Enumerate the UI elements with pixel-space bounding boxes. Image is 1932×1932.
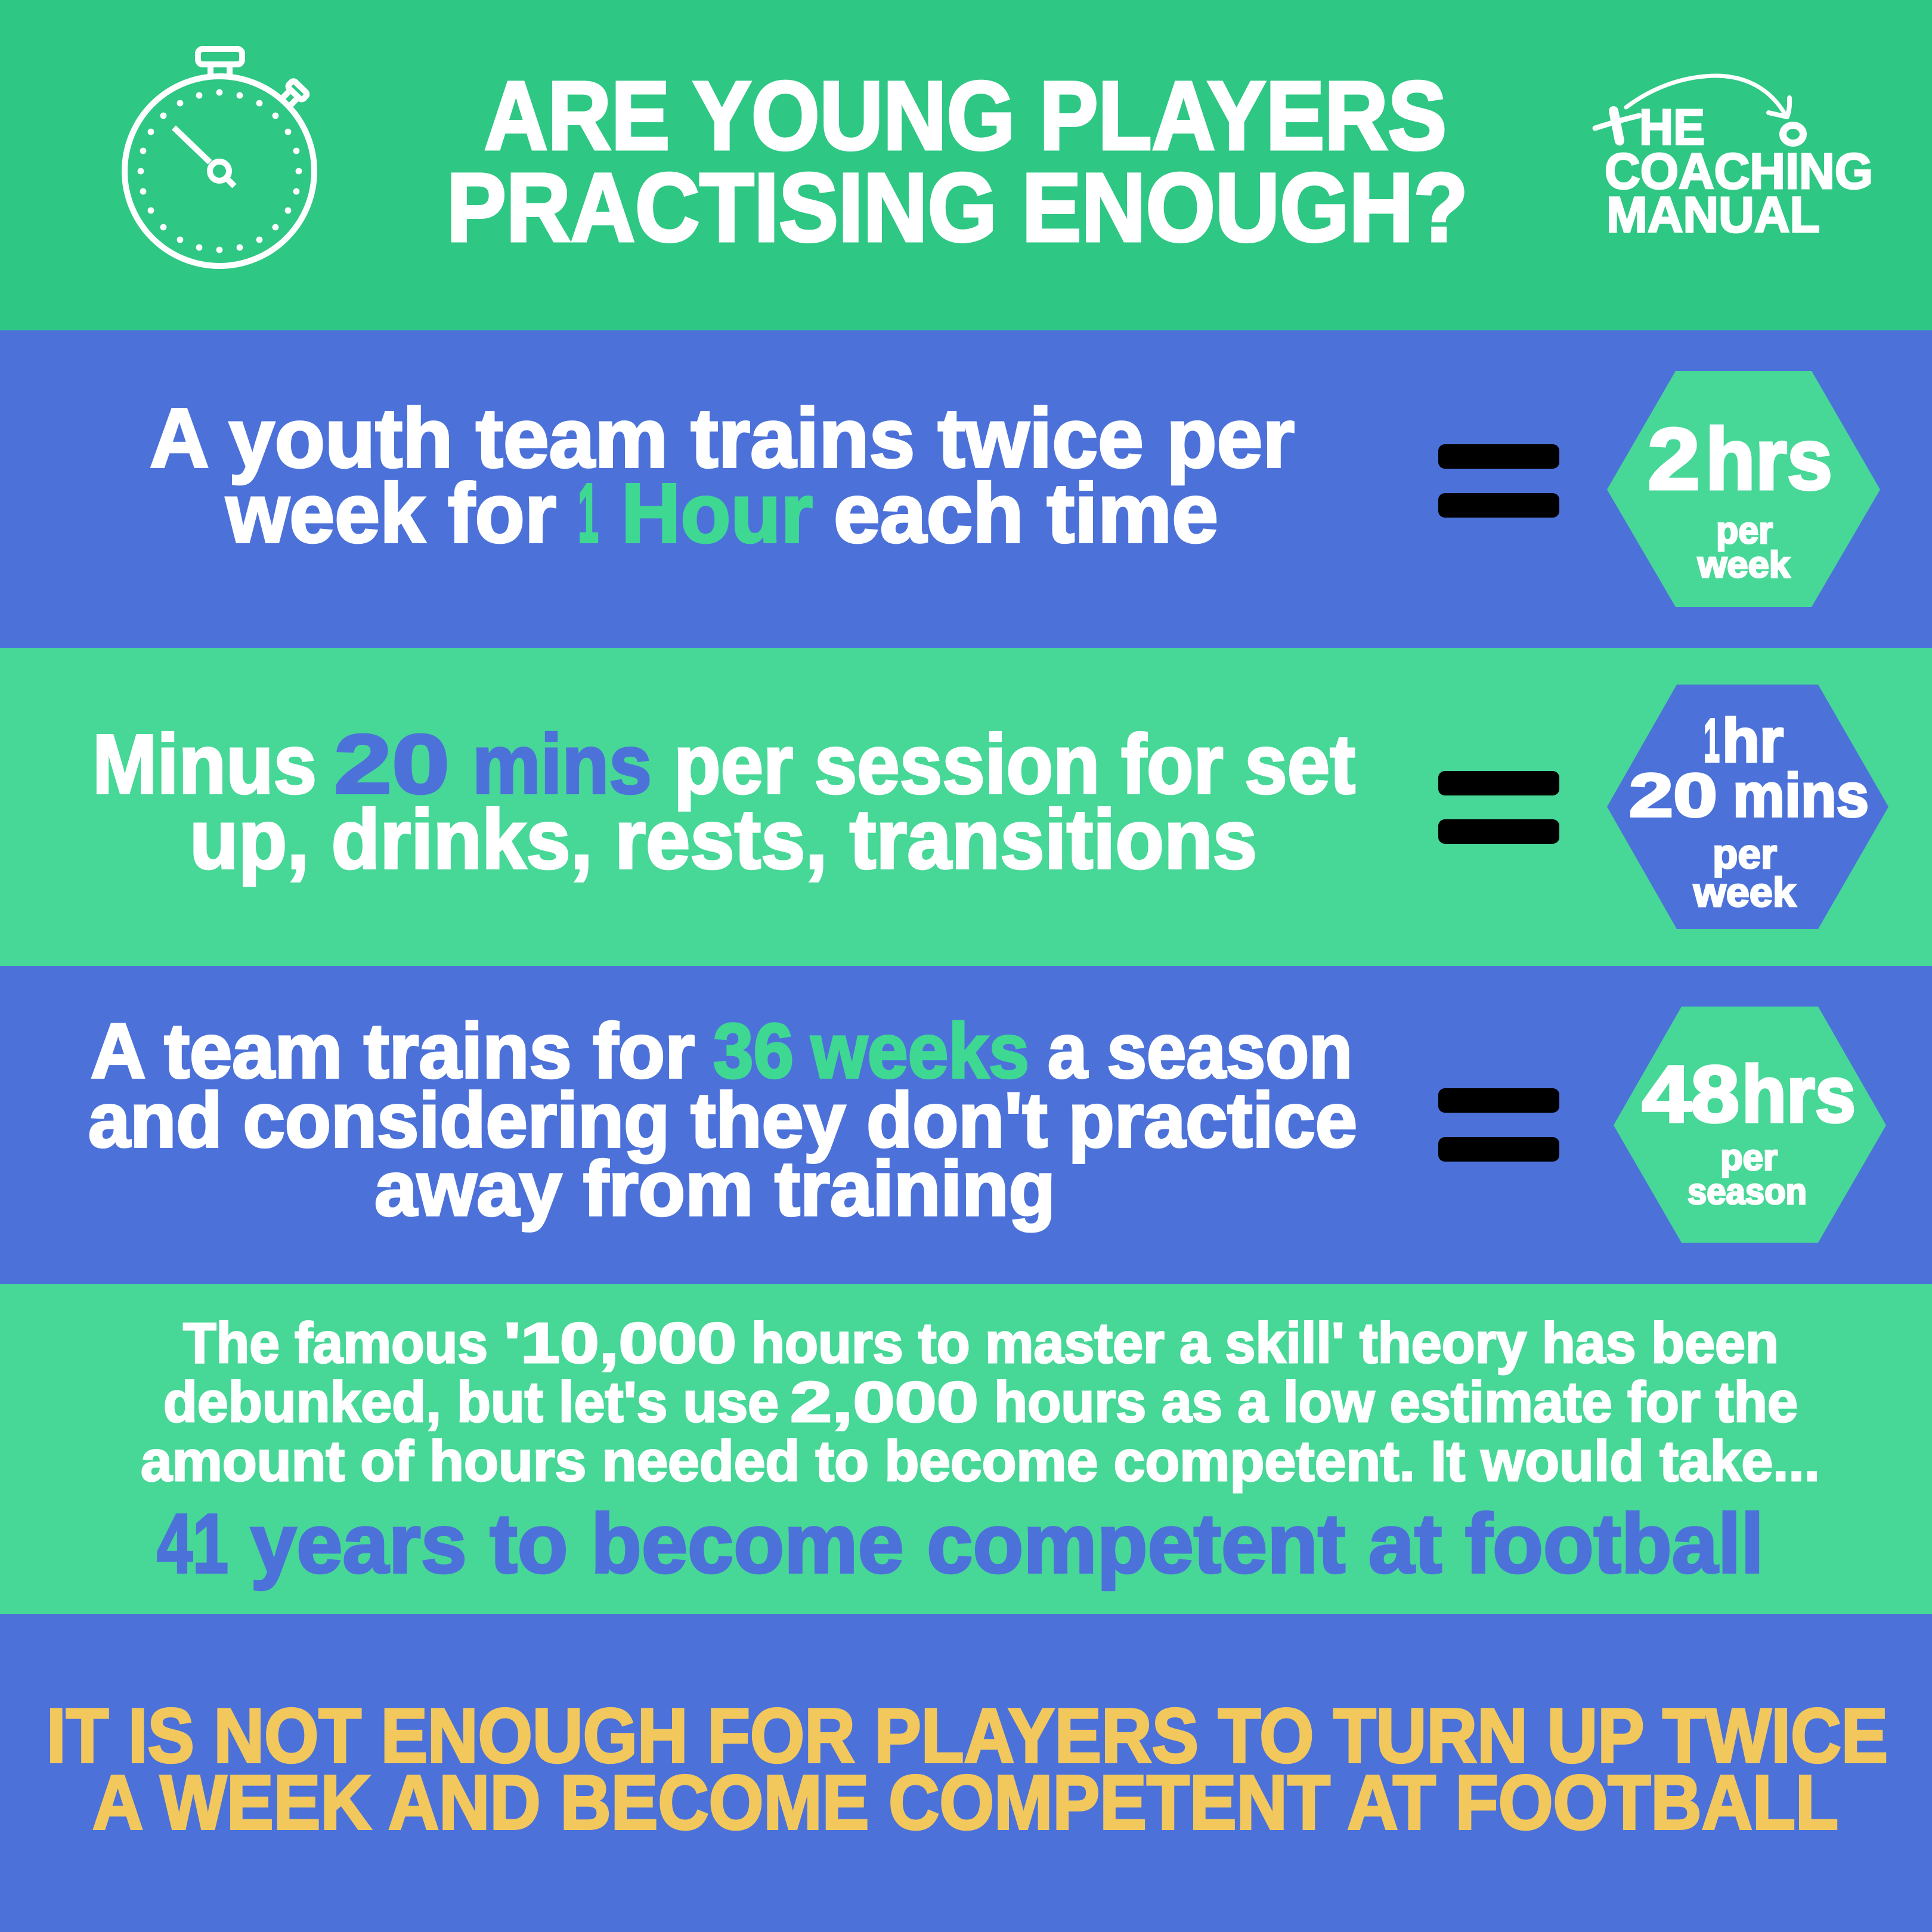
title: ARE YOUNG PLAYERS [484, 61, 1447, 170]
logo: The Coaching Manual: COACHING [1605, 143, 1873, 199]
paragraph text: hours to master a skill' theory has been [751, 1311, 1779, 1375]
paragraph text: debunked, but let's use [163, 1370, 779, 1434]
statement text: 1 [578, 466, 599, 560]
panel: youth team trains [0, 330, 1932, 648]
logo: The Coaching Manual [1595, 76, 1873, 243]
statement text: weeks [810, 1007, 1029, 1094]
statement text: mins [472, 717, 652, 811]
statement text: per session for set [674, 717, 1355, 811]
hexagon: 48hrs per season: per [1720, 1137, 1778, 1178]
panel: 36 weeks a season [0, 966, 1932, 1284]
paragraph text: hours as a low estimate for the [994, 1370, 1798, 1434]
hexagon: 1hr 20 mins per week: per [1713, 831, 1777, 877]
logo: The Coaching Manual: HE [1639, 99, 1705, 155]
hexagon: 1hr 20 mins per week: mins [1733, 761, 1869, 829]
hexagon: 2hrs per week [1607, 371, 1880, 607]
hexagon: 2hrs per week: week [1697, 544, 1791, 586]
statement text: a season [1048, 1007, 1352, 1094]
title [447, 61, 1468, 262]
logo: The Coaching Manual: MANUAL [1606, 187, 1820, 243]
highlighted result: 41 [157, 1496, 228, 1590]
equals sign [1438, 444, 1559, 518]
hexagon: 1hr 20 mins per week: 20 [1629, 761, 1717, 829]
statement text: 20 [334, 717, 450, 811]
hexagon: 1hr 20 mins per week: week [1693, 869, 1797, 915]
hexagon: 2hrs per week: per [1716, 510, 1773, 552]
hexagon: 48hrs per season [1614, 1007, 1886, 1243]
statement text: Hour [621, 466, 813, 560]
statement text: Minus [92, 717, 317, 811]
icon: stopwatch [125, 49, 314, 266]
statement text: away from training [374, 1145, 1055, 1232]
statement text [88, 1007, 1357, 1232]
statement text: A youth team trains twice per [150, 391, 1295, 485]
statement text: and considering they don't practice [88, 1076, 1357, 1163]
hexagon: 2hrs per week: hrs [1705, 410, 1832, 507]
panel: minus 20 mins [0, 648, 1932, 966]
paragraph text: The famous [183, 1311, 488, 1375]
panel: 10,000 hours theory [0, 1284, 1932, 1614]
paragraph text: '10,000 [504, 1311, 736, 1375]
statement text [150, 391, 1295, 560]
title: PRACTISING ENOUGH? [447, 153, 1468, 262]
statement text: up, drinks, rests, transitions [190, 792, 1257, 886]
equals sign [1438, 1088, 1559, 1162]
paragraph text [141, 1311, 1820, 1493]
statement text [92, 717, 1355, 886]
hexagon: 2hrs per week: 2 [1648, 410, 1700, 507]
statement text: week for [225, 466, 556, 560]
paragraph text: 2,000 [790, 1370, 979, 1434]
panel: conclusion [0, 1614, 1932, 1932]
statement text: A team trains for [91, 1007, 695, 1094]
panel: header [0, 0, 1932, 330]
hexagon: 48hrs per season: 48 [1642, 1050, 1739, 1139]
highlighted result: years to become competent at football [250, 1496, 1764, 1590]
hexagon: 48hrs per season: season [1688, 1171, 1807, 1212]
hexagon: 1hr 20 mins per week: hr [1722, 706, 1784, 775]
paragraph text: amount of hours needed to become competent. It would take... [141, 1429, 1820, 1493]
statement text: 36 [713, 1007, 794, 1094]
hexagon: 1hr 20 mins per week [1607, 685, 1888, 929]
hexagon: 1hr 20 mins per week: 1 [1704, 706, 1720, 775]
statement text: each time [834, 466, 1218, 560]
equals sign [1438, 771, 1559, 844]
conclusion text [47, 1693, 1888, 1846]
hexagon: 48hrs per season: hrs [1742, 1050, 1856, 1139]
